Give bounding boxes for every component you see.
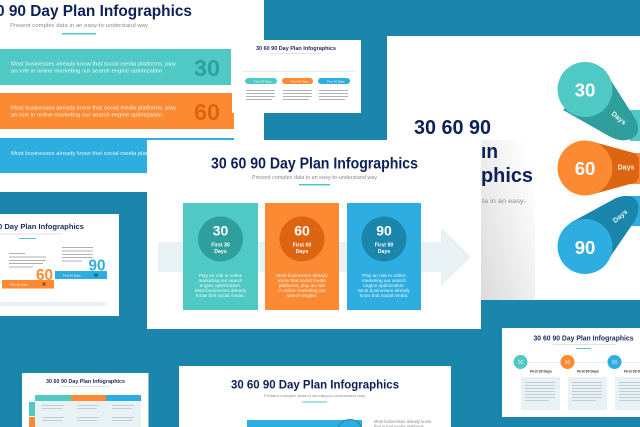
number: 60: 60: [36, 267, 53, 284]
step: 90: 90: [612, 360, 617, 366]
title: bottom-middle slide: 30 60 90 Day Plan Infographics: [231, 378, 399, 392]
card: 30: Most businesses already: [195, 288, 247, 293]
card: 60: platforms, play an role: [279, 283, 325, 288]
card: 60: First 60: [293, 242, 311, 248]
card: 90: Days: [378, 249, 390, 255]
title: right slide: [414, 117, 533, 187]
band: teal 30: [0, 49, 231, 85]
card: 60: 60: [294, 222, 310, 238]
card: 90: know that social media.: [360, 293, 408, 298]
band: orange 60: [0, 93, 234, 129]
card: 90: marketing our search: [362, 278, 406, 283]
subtitle: main slide: Present complex data in an easy-to-understand way: [252, 175, 378, 181]
band: teal 30: an role in online marketing our search engine optimization.: [11, 68, 164, 74]
card: 30: Play an role in online: [199, 273, 243, 278]
band: blue 90: Most businesses already know that social media platforms, play: [11, 151, 176, 157]
card: 90: [347, 203, 421, 310]
title: left middle slide: 0 Day Plan Infographics: [0, 222, 84, 231]
cylinder: 60 days: Days: [618, 164, 634, 172]
subtitle: right slide: ta in an easy-: [482, 198, 526, 205]
cylinder: 60 days: [558, 140, 640, 196]
text block: [374, 419, 432, 427]
band: teal 30: 30: [194, 55, 220, 81]
cylinder: 30 days: Days: [610, 111, 627, 127]
step: 60: [560, 355, 607, 410]
step: 30: [514, 355, 560, 410]
card: 60: Days: [296, 249, 308, 255]
panel: bottom-left slide: [22, 373, 148, 427]
pill: 90: First 90 Days: [327, 80, 345, 84]
band: teal 30: Most businesses already know that social media platforms, play: [11, 62, 176, 68]
title: right slide: ın: [481, 141, 498, 163]
cylinder: 30 days: 30: [575, 80, 595, 100]
card: 90: First 90: [375, 242, 393, 248]
accent rule: bottom-middle slide: [302, 402, 327, 403]
blue banner: [247, 420, 362, 427]
card: 90: 90: [376, 222, 392, 238]
step: 30: First 30 Days: [530, 370, 552, 374]
accent rule: top-left slide: [62, 33, 96, 34]
cylinder: 30 days: [558, 62, 640, 141]
timeline arrow: [0, 300, 107, 308]
panel: bottom-right slide: [502, 328, 640, 417]
band: blue 90: [0, 138, 234, 173]
card: 30: engine optimization.: [200, 283, 241, 288]
step: 90: [608, 355, 640, 410]
card: 30: First 30: [211, 242, 230, 248]
card: 30: [183, 203, 258, 310]
shadow of main slide: [481, 140, 535, 300]
title: right slide: phics: [481, 165, 533, 187]
card: 60: in online marketing our: [278, 288, 326, 293]
card: 60: know that social media: [278, 278, 326, 283]
panel: right slide: [387, 36, 640, 300]
cylinder: 90 days: Days: [612, 209, 629, 225]
background arrow: [158, 227, 471, 286]
step: 60: First 60 Days: [577, 370, 599, 374]
band: orange 60: Most businesses already know that social media platforms, play: [11, 106, 176, 112]
title: top-left slide: 0 90 Day Plan Infographics: [0, 3, 192, 20]
text block: Most businesses already know: [374, 419, 432, 424]
card: 60: search engine.: [287, 293, 317, 298]
title: bottom-left slide: 30 60 90 Day Plan Infographics: [46, 379, 125, 385]
card: 30: know that social media.: [196, 293, 245, 298]
title: right slide: 30 60 90: [414, 117, 491, 139]
subtitle: top-left slide: Present complex data in an easy-to-understand way: [10, 23, 149, 29]
cylinder: 60 days: 60: [575, 158, 595, 179]
panel: small timeline slide: [232, 40, 361, 113]
card: 30: 30: [213, 222, 228, 238]
title: small timeline slide: 30 60 90 Day Plan Infographics: [256, 46, 336, 52]
subtitle: bottom-middle slide: Present complex data in an easy-to-understand way: [264, 394, 365, 398]
title: main slide: 30 60 90 Day Plan Infographics: [211, 156, 418, 172]
pill: 30: First 30 Days: [254, 80, 272, 84]
panel: left middle slide: [0, 214, 119, 316]
cylinder: 90 days: [558, 196, 640, 274]
cylinder: 90 days: 90: [575, 237, 595, 258]
card: 30: Days: [214, 249, 227, 255]
step: 60: 60: [565, 360, 570, 366]
panel: top-left slide: [0, 0, 264, 192]
panel: main slide: [147, 140, 481, 329]
bar: 90: First 90 Days: [63, 274, 81, 278]
card: 60: Most businesses already: [276, 273, 328, 278]
card: 60: [265, 203, 339, 310]
panel: bottom-middle slide: [179, 366, 451, 427]
table: [29, 395, 141, 427]
pill: 60: First 60 Days: [291, 80, 309, 84]
card: 30: marketing our search: [198, 278, 243, 283]
band: orange 60: 60: [194, 99, 220, 125]
card: 90: Play an role in online: [362, 273, 406, 278]
accent rule: main slide: [299, 184, 330, 186]
step: 30: 30: [518, 360, 523, 366]
card: 90: engine optimization.: [363, 283, 405, 288]
card: 90: Most businesses already: [358, 288, 410, 293]
title: bottom-right slide: 30 60 90 Day Plan Infographics: [534, 336, 634, 342]
number: 90: 90: [88, 258, 106, 274]
band: orange 60: an role in online marketing our search engine optimization.: [11, 112, 164, 118]
bar: 60: First 60 Days: [10, 282, 28, 286]
